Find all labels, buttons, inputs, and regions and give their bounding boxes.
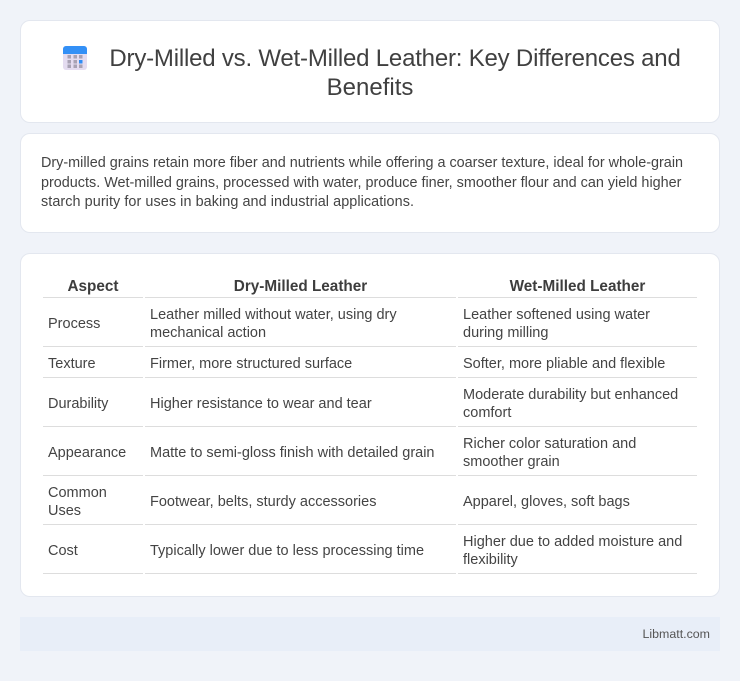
row: texture wet: Softer, more pliable and flexible <box>463 356 665 372</box>
table header: dry: Dry-Milled Leather <box>234 278 367 295</box>
row: cost wet: Higher due to added moisture and <box>463 534 682 550</box>
row: cost wet: flexibility <box>463 552 518 568</box>
row: uses label: Common <box>48 485 107 501</box>
footer text: Libmatt.com <box>643 627 710 641</box>
row: uses wet: Apparel, gloves, soft bags <box>463 494 630 510</box>
row: appearance wet <box>463 436 636 470</box>
row: process dry: Leather milled without water, using dry <box>150 307 397 323</box>
row: process label: Process <box>48 316 100 332</box>
row: process wet <box>463 307 650 341</box>
row: cost label: Cost <box>48 543 78 559</box>
row: durability wet <box>463 387 678 421</box>
title: Benefits <box>327 74 413 101</box>
title: Dry-Milled vs. Wet-Milled Leather: Key Differences and <box>109 45 681 72</box>
row: durability wet: comfort <box>463 405 511 421</box>
intro text <box>41 155 683 210</box>
row: process wet: during milling <box>463 325 548 341</box>
row: uses label: Uses <box>48 503 81 519</box>
row: texture dry: Firmer, more structured surface <box>150 356 352 372</box>
table header: wet: Wet-Milled Leather <box>510 278 645 295</box>
panel: table <box>20 253 720 597</box>
row: process wet: Leather softened using water <box>463 307 650 323</box>
intro text: products. Wet-milled grains, processed with water, produce finer, smoother flour and can yield higher <box>41 175 681 191</box>
table header: aspect: Aspect <box>67 278 118 295</box>
intro text: starch purity for uses in baking and industrial applications. <box>41 194 414 210</box>
row: appearance dry: Matte to semi-gloss finish with detailed grain <box>150 445 434 461</box>
row: process dry <box>150 307 397 341</box>
footer bar <box>20 617 720 651</box>
panel: intro <box>20 133 720 233</box>
panel: title card <box>20 20 720 123</box>
row: cost wet <box>463 534 682 568</box>
row: process dry: mechanical action <box>150 325 266 341</box>
intro text: Dry-milled grains retain more fiber and nutrients while offering a coarser texture, ideal for whole-grain <box>41 155 683 171</box>
row: uses label <box>48 485 107 519</box>
row: appearance label: Appearance <box>48 445 126 461</box>
title <box>109 45 681 101</box>
row: texture label: Texture <box>48 356 96 372</box>
row: durability wet: Moderate durability but enhanced <box>463 387 678 403</box>
row: durability dry: Higher resistance to wear and tear <box>150 396 372 412</box>
row: uses dry: Footwear, belts, sturdy accessories <box>150 494 376 510</box>
row: durability label: Durability <box>48 396 108 412</box>
icon: calendar <box>63 46 87 70</box>
row: cost dry: Typically lower due to less processing time <box>150 543 424 559</box>
row: appearance wet: smoother grain <box>463 454 560 470</box>
row: appearance wet: Richer color saturation and <box>463 436 636 452</box>
